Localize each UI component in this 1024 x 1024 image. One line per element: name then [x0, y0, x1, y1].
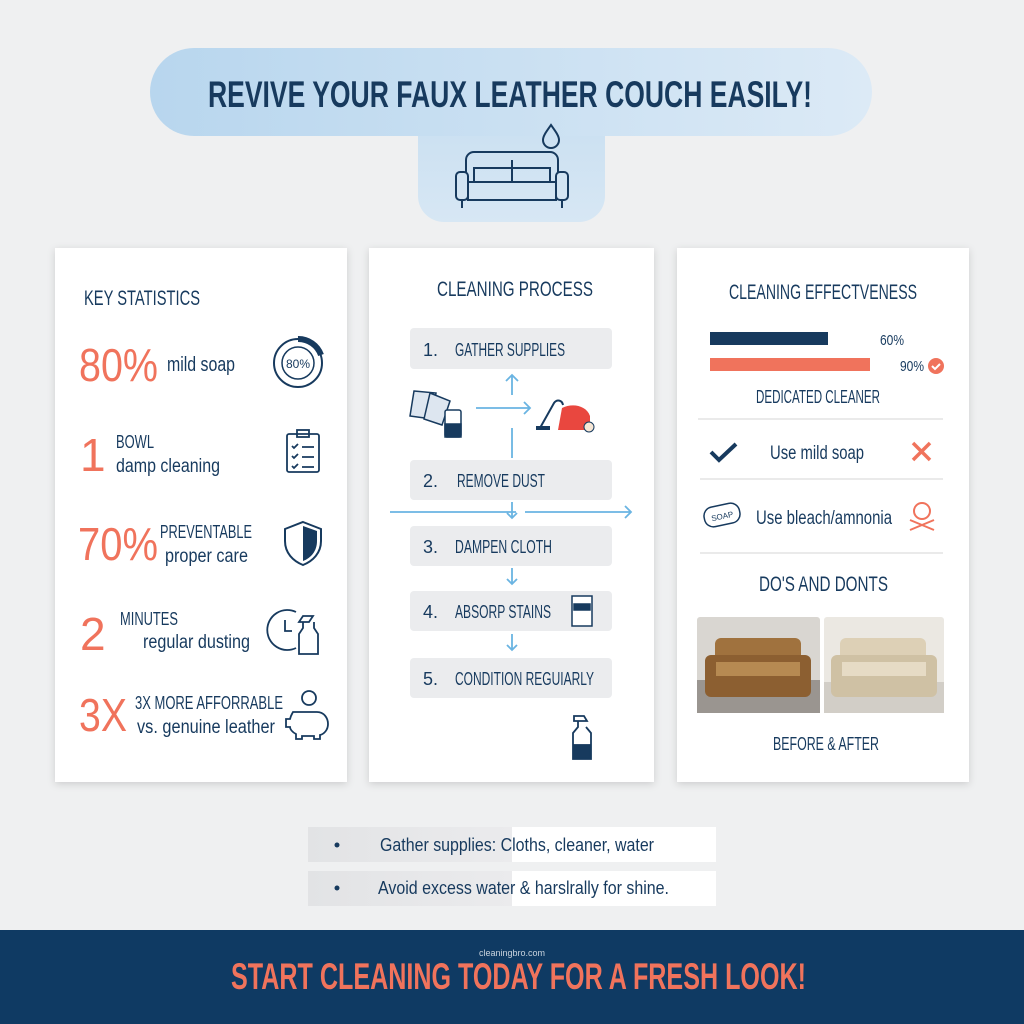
panel: cleaning process [369, 248, 654, 782]
bullet list: Avoid excess water & harslrally for shine. [378, 878, 669, 898]
footer banner [0, 930, 1024, 1024]
do row [711, 443, 930, 464]
step boxes [410, 328, 612, 698]
panel: cleaning effectiveness: DEDICATED CLEANER [756, 387, 880, 407]
stat 2 minutes: MINUTES [120, 609, 178, 629]
stat 70%: PREVENTABLE [160, 522, 252, 542]
footer banner: cleaningbro.com [479, 948, 545, 958]
stat 2 minutes: regular dusting [143, 632, 250, 653]
panel: key statistics [55, 248, 347, 782]
step boxes: CONDITION REGUIARLY [455, 669, 594, 689]
dont row: SOAP [711, 510, 734, 523]
panel: cleaning effectiveness [677, 248, 969, 782]
step boxes: GATHER SUPPLIES [455, 340, 565, 360]
icon: vacuum [536, 401, 594, 432]
stat 70%: 70% [78, 518, 158, 570]
stat 80%: 80% [79, 339, 158, 391]
panel: cleaning effectiveness: DO'S AND DONTS [759, 573, 888, 596]
icon: cloth and bottle [410, 391, 461, 437]
stat 80%: 80% [286, 357, 310, 371]
stat 2 minutes: 2 [80, 608, 106, 660]
icon: couch with drop [456, 125, 568, 208]
stat 3x [79, 689, 328, 741]
stat 2 minutes [80, 608, 318, 660]
bullet list [308, 827, 716, 906]
stat 1 bowl [80, 429, 319, 481]
bar chart [710, 332, 944, 375]
panel: cleaning process: CLEANING PROCESS [437, 278, 593, 301]
dont row [702, 501, 934, 530]
stat 70%: proper care [165, 546, 248, 567]
stat 3x: 3X [79, 689, 127, 741]
step boxes: 4. [423, 602, 438, 622]
step boxes: DAMPEN CLOTH [455, 537, 552, 557]
step boxes: 1. [423, 340, 438, 360]
stat 1 bowl: BOWL [116, 432, 154, 452]
title banner [150, 48, 872, 222]
bar chart: 90% [900, 358, 924, 375]
dont row: Use bleach/amnonia [756, 508, 892, 529]
step boxes: ABSORP STAINS [455, 602, 551, 622]
stat 1 bowl: damp cleaning [116, 456, 220, 477]
do row: Use mild soap [770, 443, 864, 464]
step boxes: REMOVE DUST [457, 471, 545, 491]
icon: spray bottle [573, 716, 591, 759]
bar chart: 60% [880, 332, 904, 349]
after image [824, 617, 944, 713]
step boxes: 2. [423, 471, 438, 491]
step boxes: 5. [423, 669, 438, 689]
stat 80%: mild soap [167, 354, 235, 376]
icon: box [572, 596, 592, 626]
stat 3x: vs. genuine leather [137, 717, 276, 738]
stat 80% [79, 339, 322, 391]
panel: cleaning effectiveness: CLEANING EFFECTVENESS [729, 281, 917, 304]
before image [697, 617, 820, 713]
stat 1 bowl: 1 [80, 429, 106, 481]
panel: cleaning effectiveness: BEFORE & AFTER [773, 734, 879, 754]
arrows [390, 375, 631, 650]
step boxes: 3. [423, 537, 438, 557]
stat 3x: 3X MORE AFFORRABLE [135, 693, 283, 713]
stat 70% [78, 518, 321, 570]
panel: key statistics: KEY STATISTICS [84, 287, 200, 310]
bullet list: Gather supplies: Cloths, cleaner, water [380, 835, 654, 855]
